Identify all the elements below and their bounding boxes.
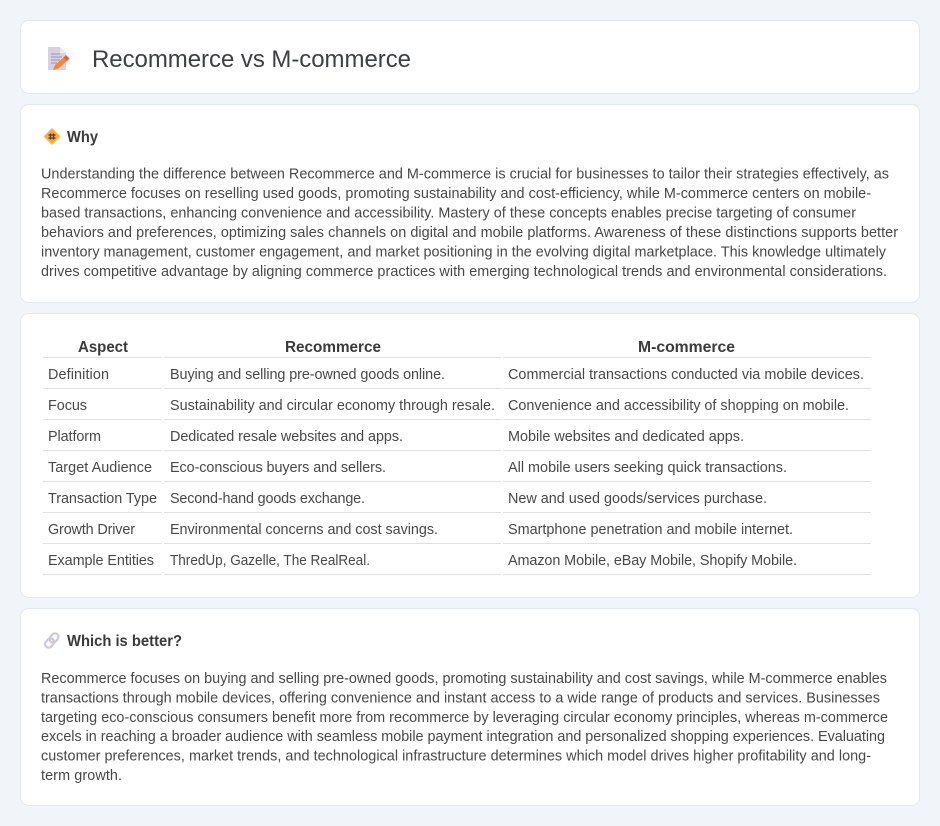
table header: Aspect (78, 339, 128, 356)
text block: why paragraph: Understanding the difference between Recommerce and M-commerce is crucial for businesses to tailor their strategies effectively, as (41, 166, 889, 182)
row: growth driver: Environmental concerns and cost savings. (170, 522, 438, 538)
text block: why paragraph: based transactions, enhancing convenience and accessibility. Mastery of these concepts enables precise targeting of consumer (41, 206, 856, 222)
row: definition (48, 367, 864, 383)
text block: which is better paragraph: customer preferences, market trends, and technological infrastructure determines which model drives higher profitability and long- (41, 748, 871, 764)
text block: which is better paragraph: excels in reaching a broader audience with seamless mobile payment integration and personalized shopping experiences. Evaluating (41, 729, 885, 745)
table header (78, 339, 735, 356)
icon: document with pencil (48, 47, 70, 70)
text block: which is better paragraph (41, 671, 888, 784)
row: platform: Mobile websites and dedicated apps. (508, 429, 744, 445)
row: target audience: Target Audience (48, 460, 152, 476)
row: transaction type: Second-hand goods exchange. (170, 491, 365, 507)
table header: M-commerce (638, 339, 735, 356)
row: example entities: ThredUp, Gazelle, The RealReal. (170, 553, 370, 569)
text block: why paragraph: drives competitive advantage by aligning commerce practices with emerging technological trends and environmental considerations. (41, 264, 887, 280)
row: transaction type (48, 491, 767, 507)
row: growth driver: Growth Driver (48, 522, 135, 538)
row: example entities: Example Entities (48, 553, 154, 569)
row: transaction type: Transaction Type (48, 491, 157, 507)
icon: diamond sign (44, 128, 60, 144)
row: target audience: Eco-conscious buyers and sellers. (170, 460, 386, 476)
row: growth driver (48, 522, 793, 538)
row: definition: Commercial transactions conducted via mobile devices. (508, 367, 864, 383)
panel: which is better (20, 608, 920, 806)
row: focus: Focus (48, 398, 87, 414)
panel: title header (20, 20, 920, 94)
text block: which is better paragraph: targeting eco-conscious consumers benefit more from recommerce by leveraging circular economy principles, whereas m-commerce (41, 710, 888, 726)
heading: which is better: Which is better? (67, 633, 182, 650)
row: example entities: Amazon Mobile, eBay Mobile, Shopify Mobile. (508, 553, 797, 569)
text block: why paragraph (41, 166, 898, 280)
row: platform (48, 429, 744, 445)
row: platform: Platform (48, 429, 101, 445)
title: Recommerce vs M-commerce (92, 46, 411, 73)
row: focus: Convenience and accessibility of shopping on mobile. (508, 398, 849, 414)
text block: which is better paragraph: transactions through mobile devices, offering convenience and instant access to a wide range of products and services. Businesses (41, 690, 880, 706)
text block: why paragraph: inventory management, customer engagement, and market positioning in the evolving digital marketplace. This knowledge ultimately (41, 244, 887, 260)
table header: Recommerce (285, 339, 381, 356)
row: definition: Definition (48, 367, 109, 383)
row: focus: Sustainability and circular economy through resale. (170, 398, 495, 414)
text block: why paragraph: behaviors and preferences, optimizing sales channels on digital and mobile platforms. Awareness of these distinctions supports better (41, 225, 898, 241)
panel: why (20, 104, 920, 302)
row: example entities (48, 553, 797, 569)
row: transaction type: New and used goods/services purchase. (508, 491, 767, 507)
row: target audience: All mobile users seeking quick transactions. (508, 460, 787, 476)
row: platform: Dedicated resale websites and apps. (170, 429, 403, 445)
row: target audience (48, 460, 787, 476)
row: growth driver: Smartphone penetration and mobile internet. (508, 522, 793, 538)
row: focus (48, 398, 849, 414)
text block: why paragraph: Recommerce focuses on reselling used goods, promoting sustainability and cost-efficiency, while M-commerce centers on mobile- (41, 186, 871, 202)
heading: why: Why (67, 129, 98, 146)
text block: which is better paragraph: term growth. (41, 768, 122, 784)
panel: comparison table (20, 314, 920, 598)
row: definition: Buying and selling pre-owned goods online. (170, 367, 445, 383)
icon: chain link (44, 632, 60, 649)
table grid lines (43, 357, 871, 575)
text block: which is better paragraph: Recommerce focuses on buying and selling pre-owned goods, promoting sustainability and cost savings, while M-commerce enables (41, 671, 887, 687)
